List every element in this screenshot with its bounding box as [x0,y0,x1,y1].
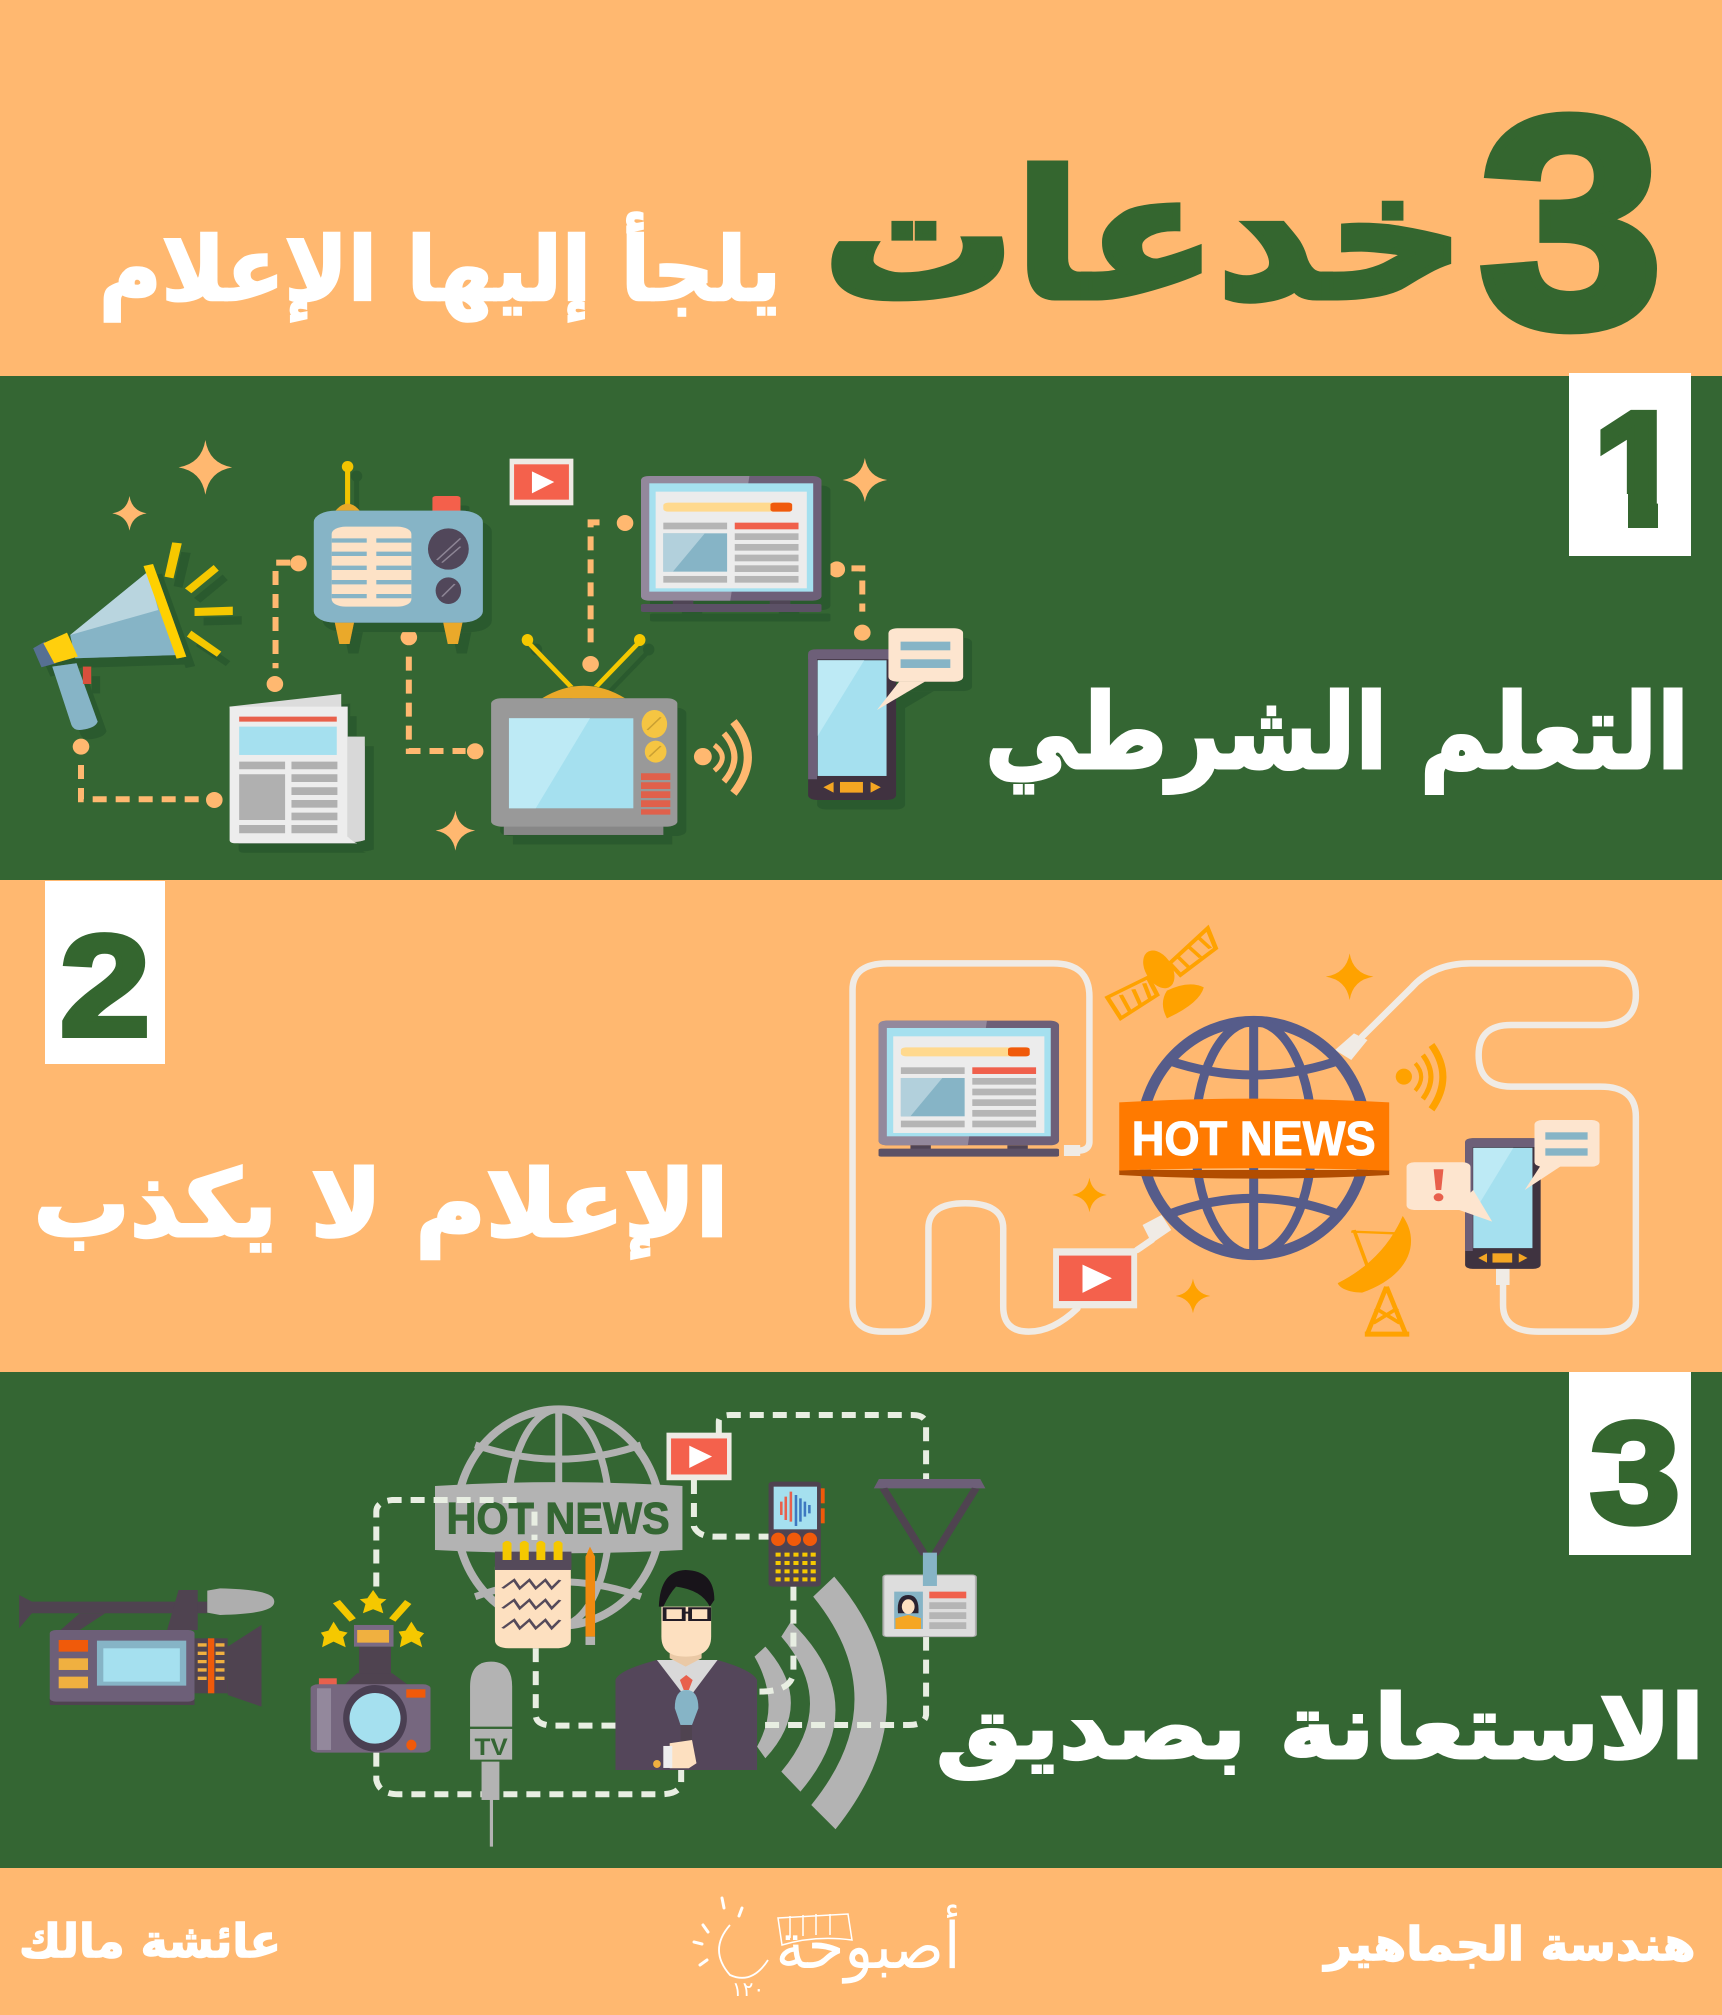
hot news banner [1119,1099,1389,1179]
globe [1141,1021,1366,1255]
background: footer band [0,1868,1722,2015]
logo [694,1898,960,2001]
newsroom illustration [19,1408,985,1847]
heading 2: الإعلام لا يكذب [34,1151,729,1259]
icon: television [491,634,677,835]
hot news banner: HOT NEWS [1132,1111,1376,1165]
panel 1: conditioned learning [33,373,1691,851]
number box 3 [1569,1372,1691,1555]
number box 3: 3 [1590,1394,1680,1553]
icon: news reporter [615,1570,757,1770]
signal waves [755,1577,887,1829]
icon: tv microphone [470,1662,512,1847]
sparkle stars [112,440,887,851]
dashed connectors [376,1415,926,1794]
panel 3: phone a friend [19,1372,1704,1847]
icon: photo camera with flash [311,1590,431,1753]
icon: megaphone [33,542,233,730]
author name: عائشة مالك [19,1914,281,1968]
icon: laptop [879,1021,1059,1157]
number box 2: 2 [60,907,150,1066]
sparkle stars [1072,953,1373,1313]
icon: radio [314,461,483,644]
gray globe [457,1408,661,1627]
logo: أصبوحة [776,1904,960,1984]
background: green band 1 [0,376,1722,880]
hot news globe illustration [853,928,1636,1337]
number box 2 [45,881,165,1066]
icon: smartphone with chat bubble [808,628,963,800]
icon: audio recorder [769,1482,825,1587]
category label: هندسة الجماهير [1322,1917,1696,1971]
title word: خدعات [823,136,1465,339]
icon: satellite [1107,928,1216,1018]
icon: notepad and pencil [495,1541,595,1648]
icon: video play tile [667,1433,732,1480]
icon: press badge with lanyard [874,1479,985,1637]
icon: laptop [641,476,821,612]
title [99,54,1664,390]
icon: tv microphone: TV [475,1733,508,1760]
number box 1: 1 [1594,379,1682,558]
panel 2: media does not lie [34,881,1636,1337]
connector dots [73,515,871,808]
icon: newspaper [230,694,365,843]
icon: smartphone with bubbles [1407,1120,1600,1269]
icon: wifi signal [694,722,748,793]
dashed connectors [81,522,862,799]
icon: satellite dish and tower [1338,1216,1411,1337]
gray hot news banner: HOT NEWS [446,1493,670,1543]
background: peach band 2 [0,880,1722,1372]
title numeral 3: 3 [1478,54,1664,390]
media devices illustration [33,440,963,851]
logo: ١٢٠ [732,1977,764,2001]
icon: video play tile [1053,1248,1137,1308]
background: top band [0,0,1722,376]
footer [19,1898,1696,2001]
gray hot news banner [435,1482,682,1553]
icon: video camera [19,1588,274,1707]
subtitle: يلجأ إليها الإعلام [99,212,781,322]
background: green band 3 [0,1372,1722,1868]
icon: video play tile [510,459,573,505]
cables [853,963,1636,1332]
icon: wifi signal [1396,1045,1443,1109]
heading 3: الاستعانة بصديق [936,1676,1704,1780]
